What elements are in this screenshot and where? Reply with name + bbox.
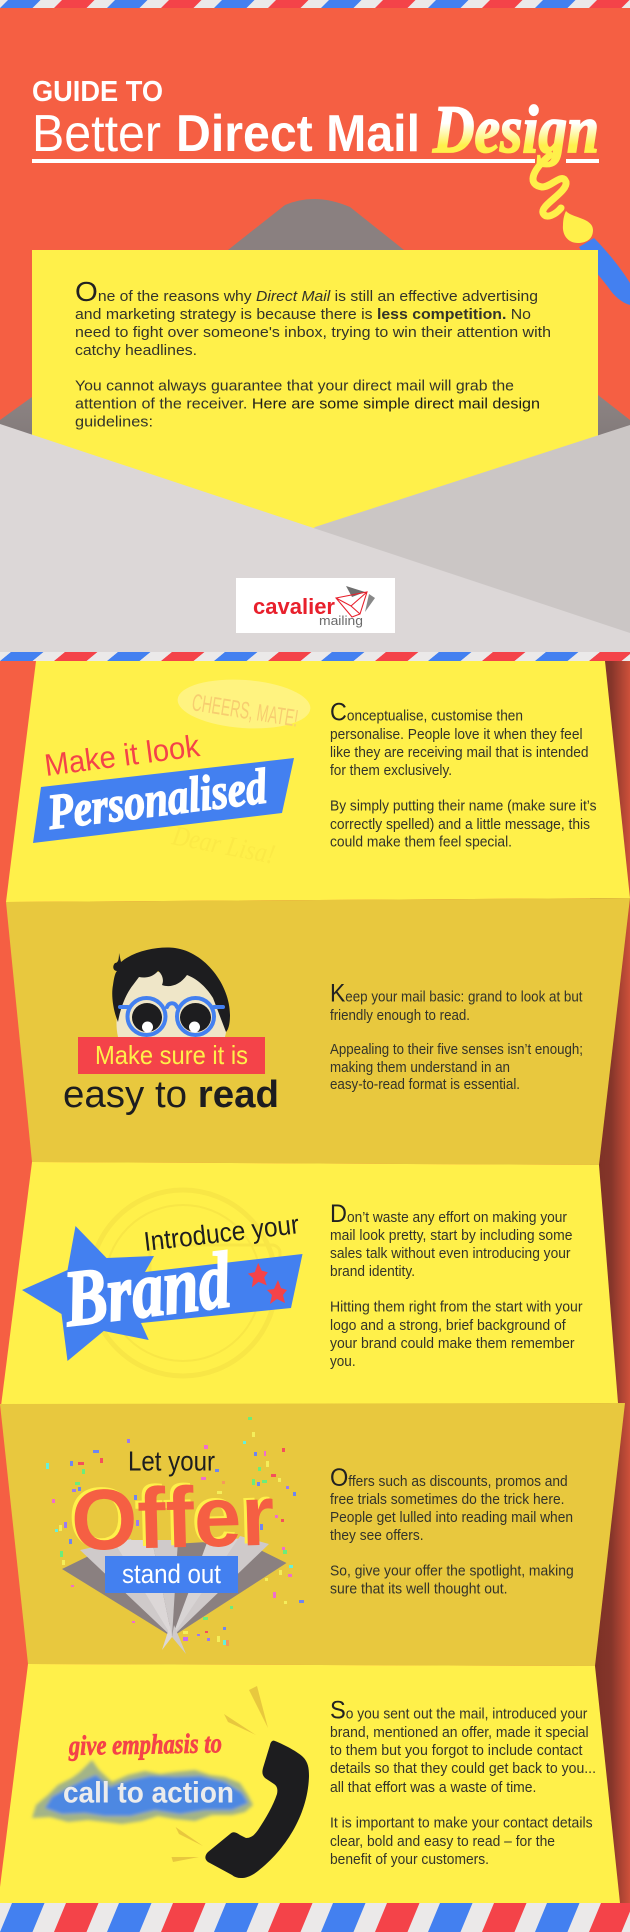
airmail stripe: top bbox=[0, 0, 630, 8]
dear lisa note: Dear Lisa! bbox=[169, 820, 278, 871]
logo: cavalier mailing: mailing bbox=[319, 613, 363, 628]
body text: sales talk without even introducing your bbox=[330, 1246, 571, 1262]
body text: logo and a strong, brief background of bbox=[330, 1318, 567, 1334]
panel: intro letter bbox=[32, 250, 598, 535]
heading: offer: Offer bbox=[67, 1466, 272, 1567]
logo: cavalier mailing: cavalier bbox=[253, 594, 335, 619]
envelope front left flap bbox=[0, 424, 630, 652]
body text: correctly spelled) and a little message, this bbox=[330, 817, 590, 833]
body text: for them exclusively. bbox=[330, 763, 452, 779]
body text: So, give your offer the spotlight, making bbox=[330, 1564, 574, 1580]
heading: personalised: Personalised bbox=[44, 757, 271, 840]
heading: call to action: call to action bbox=[63, 1776, 234, 1810]
heading: make it look: Make it look bbox=[42, 728, 202, 783]
red banner bbox=[78, 1037, 265, 1074]
body text: friendly enough to read. bbox=[330, 1008, 470, 1024]
blue banner bbox=[33, 758, 294, 843]
body text bbox=[330, 980, 583, 1093]
body text: all that effort was a waste of time. bbox=[330, 1780, 536, 1796]
airmail stripe: middle bbox=[0, 652, 630, 661]
body text: sure that its well thought out. bbox=[330, 1582, 508, 1598]
heading: give emphasis to: give emphasis to bbox=[68, 1728, 222, 1762]
icon: telephone bbox=[205, 1741, 309, 1878]
panel: easy to read bbox=[6, 898, 630, 1165]
title underline bbox=[32, 159, 599, 163]
speech ellipse bbox=[176, 675, 312, 733]
body text: By simply putting their name (make sure it’s bbox=[330, 798, 596, 814]
body text bbox=[330, 1464, 574, 1598]
body text bbox=[330, 1696, 596, 1868]
body text: Don’t waste any effort on making your bbox=[330, 1200, 567, 1228]
heading: offer: Offer bbox=[70, 1468, 275, 1569]
body text: Conceptualise, customise then bbox=[330, 698, 523, 726]
envelope back flap bbox=[0, 199, 630, 440]
body text: mail look pretty, start by including some bbox=[330, 1228, 572, 1244]
heading: design: Design bbox=[432, 91, 599, 167]
body text: making them understand in an bbox=[330, 1060, 510, 1076]
panel: make it look personalised bbox=[6, 661, 630, 902]
icon: ring marks bbox=[172, 1686, 268, 1862]
heading: let your: Let your bbox=[128, 1446, 215, 1476]
body text: they see offers. bbox=[330, 1528, 424, 1544]
heading: better: Better bbox=[32, 105, 161, 163]
confetti bbox=[46, 1417, 304, 1646]
logo: cavalier mailing bbox=[236, 578, 395, 633]
body text: free trials sometimes do the trick here. bbox=[330, 1492, 564, 1508]
body text: to them but you forgot to include contact bbox=[330, 1743, 582, 1759]
body text: clear, bold and easy to read – for the bbox=[330, 1834, 555, 1850]
intro text: You cannot always guarantee that your direct mail will grab the bbox=[75, 378, 514, 394]
faint stamp bbox=[90, 1190, 280, 1376]
body text: So you sent out the mail, introduced your bbox=[330, 1696, 588, 1724]
heading: stand out: stand out bbox=[122, 1559, 221, 1589]
body text: Appealing to their five senses isn’t enough; bbox=[330, 1042, 583, 1058]
body text: could make them feel special. bbox=[330, 834, 512, 850]
body text: People get lulled into reading mail when bbox=[330, 1510, 573, 1526]
fold shadow on right edge bbox=[590, 661, 630, 1903]
intro text: guidelines: bbox=[75, 414, 153, 430]
intro text: catchy headlines. bbox=[75, 342, 197, 359]
icon: paint brush bbox=[533, 155, 630, 305]
body text: easy-to-read format is essential. bbox=[330, 1077, 520, 1093]
heading: brand: Brand bbox=[59, 1236, 236, 1344]
intro text: One of the reasons why Direct Mail is still an effective advertising bbox=[75, 276, 538, 307]
body text: details so that they could get back to you... bbox=[330, 1761, 596, 1777]
heading: direct mail: Direct Mail bbox=[176, 105, 420, 163]
blue star banner bbox=[22, 1226, 302, 1361]
body text bbox=[330, 1200, 583, 1370]
intro text: attention of the receiver. Here are some simple direct mail design bbox=[75, 396, 540, 412]
panel: let your offer stand out bbox=[0, 1403, 625, 1666]
body text: Hitting them right from the start with your bbox=[330, 1300, 583, 1316]
body text: Keep your mail basic: grand to look at but bbox=[330, 980, 582, 1008]
intro text: and marketing strategy is because there is less competition. No bbox=[75, 306, 531, 323]
heading: guide to: GUIDE TO bbox=[32, 76, 163, 108]
icon: boy with glasses bbox=[112, 948, 230, 1037]
body text: benefit of your customers. bbox=[330, 1852, 489, 1868]
body text: personalise. People love it when they feel bbox=[330, 727, 582, 743]
body text: like they are receiving mail that is intended bbox=[330, 745, 588, 761]
intro text: need to fight over someone's inbox, trying to win their attention with bbox=[75, 324, 551, 341]
blue banner bbox=[105, 1556, 238, 1593]
airmail stripe: bottom bbox=[0, 1903, 630, 1932]
intro text bbox=[75, 276, 551, 430]
heading: easy to read: easy to read bbox=[63, 1074, 279, 1116]
body text: Offers such as discounts, promos and bbox=[330, 1464, 568, 1492]
body text: you. bbox=[330, 1354, 356, 1370]
envelope front right flap bbox=[300, 425, 630, 645]
body text: your brand could make them remember bbox=[330, 1336, 575, 1352]
body text: It is important to make your contact details bbox=[330, 1816, 593, 1832]
heading: introduce your: Introduce your bbox=[142, 1209, 301, 1257]
title bbox=[32, 76, 599, 167]
body text: brand, mentioned an offer, made it special bbox=[330, 1725, 589, 1741]
icon: red stars bbox=[247, 1262, 287, 1304]
panel: introduce your brand bbox=[1, 1162, 618, 1406]
body text: brand identity. bbox=[330, 1264, 415, 1280]
cheers mate note: CHEERS, MATE! bbox=[190, 689, 300, 733]
body text bbox=[330, 698, 596, 850]
brush stroke bbox=[32, 1760, 253, 1824]
spotlight rays bbox=[62, 1536, 286, 1654]
panel: call to action bbox=[0, 1664, 620, 1903]
heading: make sure it is: Make sure it is bbox=[95, 1040, 248, 1070]
